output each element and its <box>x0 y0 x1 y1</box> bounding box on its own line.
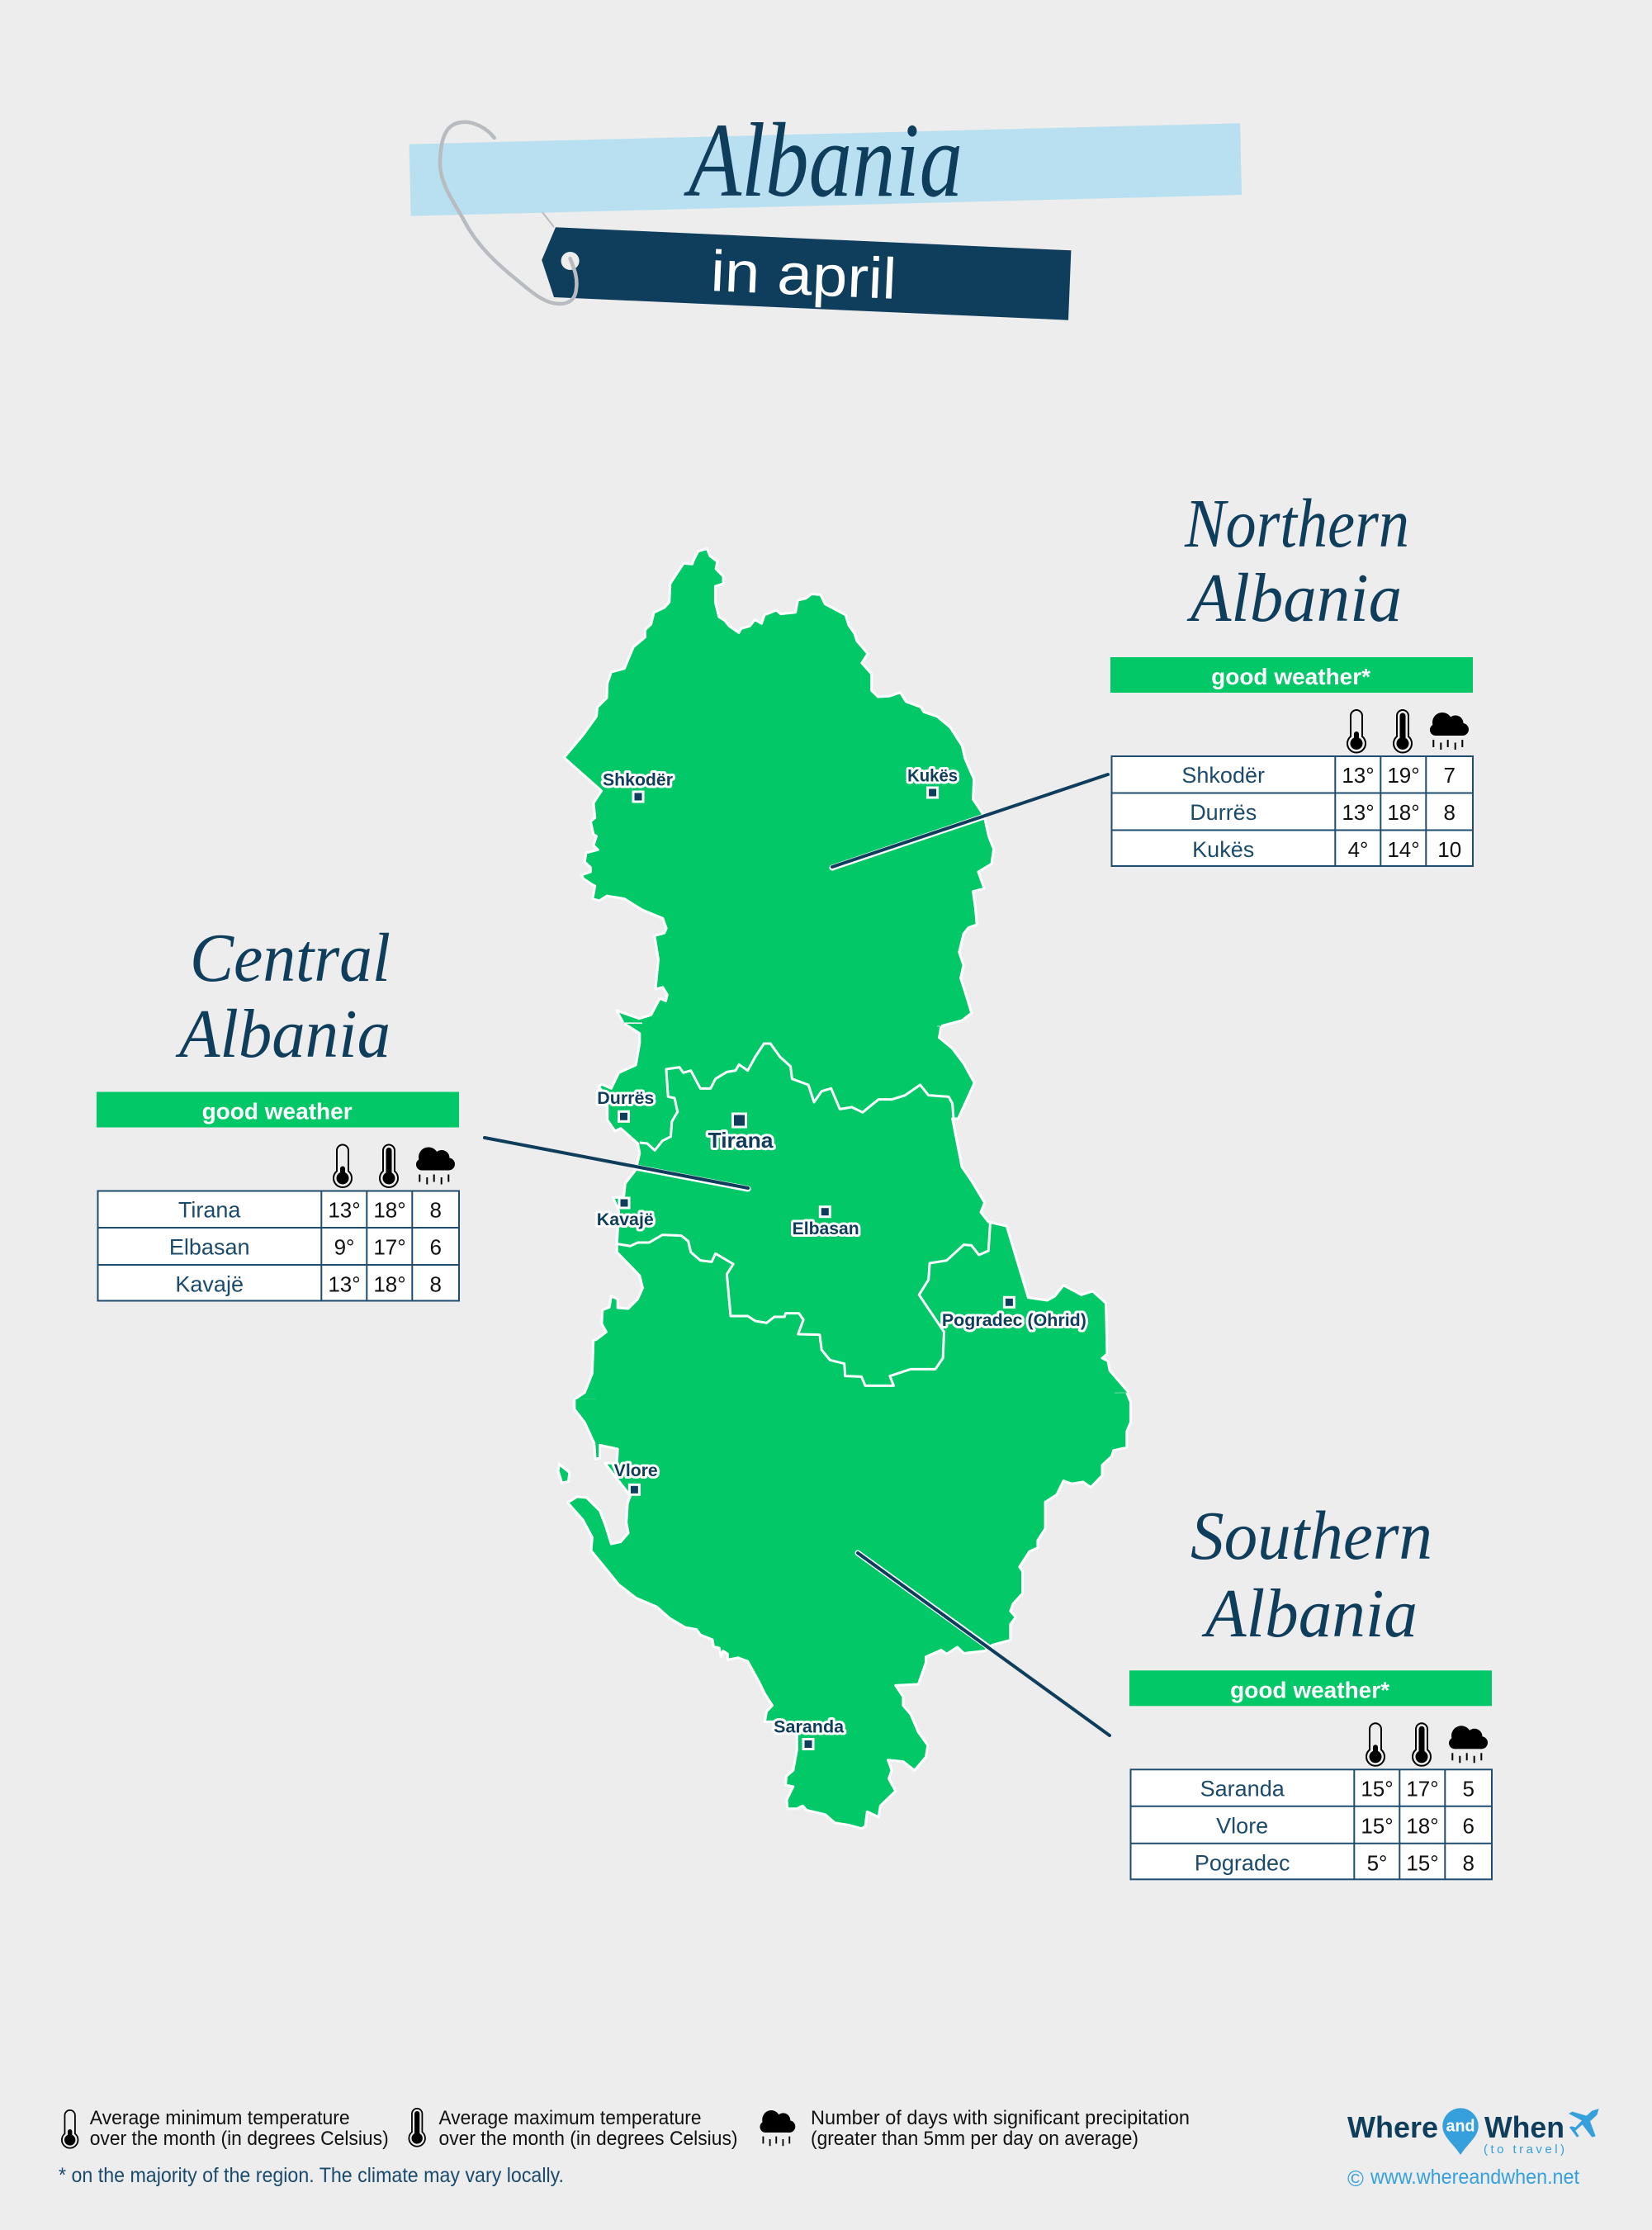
panel: Northern Albania table: 19° <box>1387 763 1420 788</box>
map seam backing <box>596 1022 1115 1410</box>
Albania script title: Albania <box>684 102 963 219</box>
city label: Tirana <box>708 1114 774 1153</box>
logo word: and: and <box>1446 2118 1474 2136</box>
city label: Kavajë: Kavajë <box>597 1210 654 1229</box>
panel: Central Albania table <box>97 1091 459 1301</box>
legend text: minimum temperature: over the month (in degrees Celsius) <box>90 2128 389 2150</box>
city label: Tirana: Tirana <box>708 1128 774 1153</box>
map of Albania <box>558 549 1130 1829</box>
panel: Northern Albania table: 13° <box>1342 763 1375 788</box>
panel: Southern Albania table: 18° <box>1406 1813 1439 1838</box>
logo tagline: (to travel) <box>1484 2142 1564 2157</box>
Tirana region border <box>640 1044 954 1150</box>
panel: Northern Albania table: 4° <box>1348 837 1368 862</box>
panel: Southern Albania table <box>1129 1670 1492 1879</box>
panel: Southern Albania table: Vlore <box>1216 1813 1268 1838</box>
panel: Central Albania table: 6 <box>429 1235 442 1260</box>
panel: Northern Albania table: Shkodër <box>1181 763 1265 788</box>
panel: Central Albania table: Tirana <box>178 1197 241 1222</box>
heading: Central Albania <box>175 920 391 1072</box>
panel: Central Albania table: 18° <box>373 1197 406 1222</box>
legend text: maximum temperature <box>439 2107 738 2150</box>
island <box>558 1465 570 1483</box>
panel: Northern Albania table: good weather* <box>1211 664 1370 689</box>
heading: Northern Albania: Albania <box>1186 560 1402 637</box>
panel: Central Albania table: good weather <box>202 1098 353 1124</box>
legend text: precipitation: Number of days with significant precipitation <box>811 2107 1190 2129</box>
logo: Where and When <box>1347 2108 1599 2191</box>
city label: Vlore <box>614 1461 658 1494</box>
heading: Central Albania: Albania <box>175 996 391 1072</box>
panel: Northern Albania table <box>1110 657 1473 866</box>
tag hole <box>561 252 580 270</box>
leader line: Southern Albania <box>858 1553 1110 1735</box>
table <box>97 1191 459 1301</box>
city label: Vlore: Vlore <box>614 1461 658 1480</box>
panel: Southern Albania table: Pogradec <box>1195 1850 1290 1875</box>
heading: Northern Albania <box>1184 485 1409 637</box>
panel: Northern Albania table: 7 <box>1443 763 1456 788</box>
light blue ribbon <box>409 123 1242 216</box>
in april subtitle: in april <box>709 239 898 311</box>
panel: Northern Albania table: 10 <box>1437 837 1461 862</box>
leader line: Central Albania <box>485 1138 748 1189</box>
city label: Elbasan <box>793 1207 859 1238</box>
status bar <box>1110 657 1473 693</box>
panel: Southern Albania table: 8 <box>1462 1850 1474 1875</box>
city label: Kukës <box>907 767 958 798</box>
leader line: Northern Albania <box>832 774 1108 868</box>
heading: Central Albania: Central <box>190 920 391 997</box>
status bar <box>97 1091 459 1128</box>
city label: Durrës: Durrës <box>597 1089 654 1108</box>
panel: Southern Albania table: 5 <box>1462 1776 1474 1801</box>
panel: Northern Albania table: 14° <box>1387 837 1420 862</box>
panel: Northern Albania table: Durrës <box>1190 800 1257 825</box>
icon: minimum thermometer <box>62 2110 78 2148</box>
table <box>1131 1769 1492 1879</box>
city label: Saranda: Saranda <box>774 1718 844 1737</box>
panel: Central Albania table: 8 <box>429 1197 442 1222</box>
logo word: When: When <box>1484 2110 1564 2144</box>
panel: Southern Albania table: Saranda <box>1200 1776 1285 1801</box>
panel: Southern Albania table: 15° <box>1406 1850 1439 1875</box>
silver tag ring <box>440 122 576 304</box>
city label: Durrës <box>597 1089 654 1121</box>
icons <box>334 1144 352 1187</box>
city label: Kukës: Kukës <box>907 767 958 786</box>
icon: plane <box>1569 2109 1599 2138</box>
city label: Saranda <box>774 1718 844 1749</box>
website: www.whereandwhen.net <box>1370 2166 1579 2189</box>
logo word: Where: Where <box>1347 2110 1438 2144</box>
tag string <box>542 212 554 227</box>
icons <box>1366 1723 1385 1766</box>
southern region <box>558 1393 1130 1829</box>
panel: Central Albania table: 17° <box>373 1235 406 1260</box>
panel: Northern Albania table: Kukës <box>1192 837 1254 862</box>
city label: Shkodër <box>603 771 673 802</box>
legend text: maximum temperature: over the month (in degrees Celsius) <box>439 2128 738 2150</box>
northern region <box>564 549 994 1026</box>
legend text: precipitation <box>811 2107 1190 2150</box>
panel: Central Albania table: 9° <box>334 1235 354 1260</box>
panel: Southern Albania table: 6 <box>1462 1813 1474 1838</box>
icon: map pin <box>1442 2108 1479 2155</box>
central region <box>575 1024 1129 1399</box>
city label: Pogradec (Ohrid): Pogradec (Ohrid) <box>942 1311 1086 1330</box>
city label: Kavajë <box>597 1198 654 1229</box>
navy luggage tag <box>542 227 1071 320</box>
panel: Central Albania table: Kavajë <box>175 1271 244 1296</box>
title banner: Albania in april <box>409 102 1242 320</box>
city label: Shkodër: Shkodër <box>603 771 673 790</box>
table <box>1111 756 1473 866</box>
legend text: precipitation: (greater than 5mm per day on average) <box>811 2128 1138 2150</box>
legend text: maximum temperature: Average maximum temperature <box>439 2107 702 2129</box>
icon: copyright: © <box>1347 2166 1364 2191</box>
status bar <box>1129 1670 1492 1706</box>
heading: Southern Albania: Southern <box>1190 1498 1432 1574</box>
city label: Pogradec (Ohrid) <box>942 1297 1086 1330</box>
heading: Northern Albania: Northern <box>1184 485 1409 562</box>
panel: Southern Albania table: good weather* <box>1230 1677 1389 1702</box>
panel: Northern Albania table: 13° <box>1342 800 1375 825</box>
panel: Central Albania table: 18° <box>373 1271 406 1296</box>
city label: Elbasan: Elbasan <box>793 1219 859 1238</box>
heading: Southern Albania <box>1190 1498 1432 1652</box>
panel: Central Albania table: 13° <box>328 1197 361 1222</box>
footnote: * on the majority of the region. The climate may vary locally. <box>59 2164 564 2187</box>
legend text: minimum temperature: Average minimum temperature <box>90 2107 350 2129</box>
panel: Northern Albania table: 8 <box>1443 800 1456 825</box>
icons <box>1347 710 1366 752</box>
Elbasan region border <box>617 1222 991 1385</box>
icon: maximum thermometer <box>409 2109 425 2147</box>
panel: Central Albania table: 13° <box>328 1271 361 1296</box>
heading: Southern Albania: Albania <box>1201 1575 1418 1652</box>
panel: Southern Albania table: 15° <box>1361 1776 1394 1801</box>
panel: Southern Albania table: 15° <box>1361 1813 1394 1838</box>
panel: Central Albania table: 8 <box>429 1271 442 1296</box>
legend <box>59 2107 1190 2187</box>
panel: Southern Albania table: 5° <box>1367 1850 1387 1875</box>
panel: Southern Albania table: 17° <box>1406 1776 1439 1801</box>
panel: Northern Albania table: 18° <box>1387 800 1420 825</box>
central coast outlines <box>575 1024 1129 1399</box>
legend text: minimum temperature <box>90 2107 389 2150</box>
icon: rain cloud <box>760 2110 795 2146</box>
panel: Central Albania table: Elbasan <box>169 1235 249 1260</box>
